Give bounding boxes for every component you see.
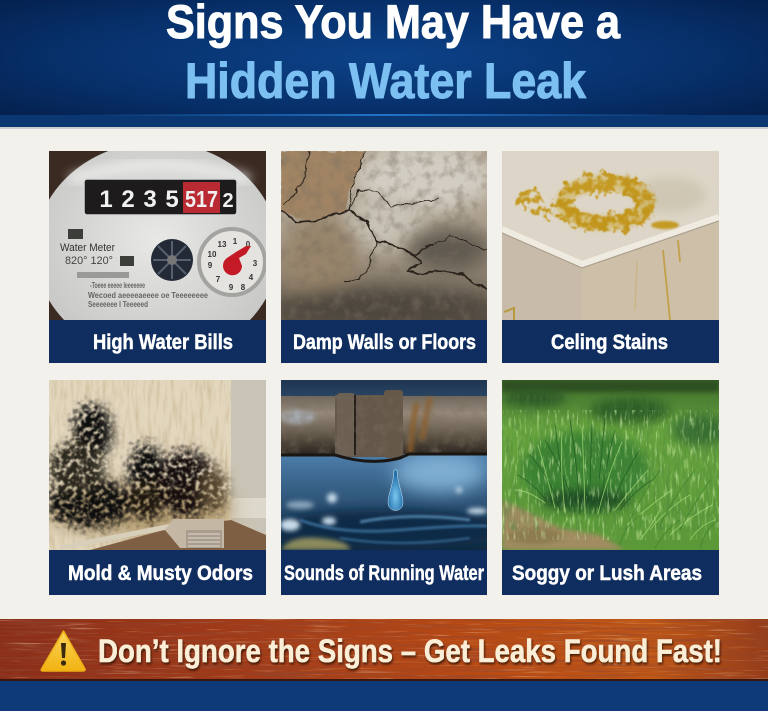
label bar: [281, 550, 487, 595]
footer band: [0, 680, 768, 711]
panel: soggy areas: [502, 380, 728, 595]
gauge dial: 1: [233, 237, 238, 246]
label bar: [49, 550, 266, 595]
gauge dial: 10: [208, 250, 217, 259]
header band: [0, 0, 768, 129]
gauge dial: 13: [218, 240, 227, 249]
photo: water meter: 5: [165, 186, 179, 213]
mud patch: [502, 500, 625, 550]
floor vent: [165, 519, 224, 548]
photo: moldy wall: [49, 380, 266, 550]
label text: High Water Bills: [93, 331, 233, 354]
gauge dial: 9: [229, 283, 234, 292]
label text: Damp Walls or Floors: [293, 331, 476, 354]
photo: water meter: -Toeee eeeee Ieeeeeee: [90, 281, 145, 290]
title: [166, 0, 621, 109]
photo: water meter: 517: [185, 186, 218, 212]
mold blotches: [48, 404, 229, 528]
gauge dial: 7: [216, 275, 221, 284]
photo: water meter: 2: [121, 186, 135, 213]
photo: water meter: 1: [99, 186, 113, 213]
label text: Sounds of Running Water: [284, 562, 484, 585]
label text: Celing Stains: [551, 331, 668, 354]
photo: water meter: Seeeeeee I Teeeeed: [88, 300, 148, 309]
gauge dial: 4: [249, 273, 254, 282]
photo: leaking pipe: [281, 380, 487, 550]
gauge dial: 3: [253, 259, 258, 268]
label text: Mold & Musty Odors: [68, 562, 253, 585]
panel: high water bills: [35, 142, 279, 363]
label bar: [281, 320, 487, 363]
gauge dial: 0: [246, 240, 251, 249]
fan dial: [151, 239, 193, 281]
gauge dial: 8: [241, 283, 246, 292]
panel: running water: [265, 380, 505, 595]
panel: mold: [45, 380, 266, 595]
label text: Soggy or Lush Areas: [512, 562, 702, 585]
label bar: [502, 550, 719, 595]
page background panel: [0, 128, 768, 619]
grass blades: [515, 418, 718, 548]
photo: lush grass: [502, 380, 719, 550]
label bar: [49, 320, 266, 363]
pipe: [281, 390, 487, 461]
icon: warning triangle: [41, 631, 85, 671]
title: Hidden Water Leak: [185, 53, 586, 109]
photo: water meter: Water Meter: [60, 242, 115, 254]
photo: water meter: [49, 151, 266, 320]
photo: water meter: 3: [143, 186, 157, 213]
gauge dial: 9: [208, 261, 213, 270]
photo: cracked wall: [281, 151, 487, 320]
panel: damp walls: [275, 144, 495, 363]
panel: ceiling stains: [502, 151, 719, 363]
label bar: [502, 320, 719, 363]
photo: water meter: 2: [222, 190, 234, 212]
warning banner: [0, 619, 768, 681]
gauge dial: [199, 229, 265, 295]
photo: stained ceiling: [502, 151, 719, 320]
photo: water meter: Wecoed aeeeeaeeee oe Teeeeeeee: [88, 291, 208, 300]
photo: water meter: 820° 120°: [65, 255, 113, 267]
water drop: [388, 470, 403, 511]
yellow stain: [516, 178, 679, 229]
